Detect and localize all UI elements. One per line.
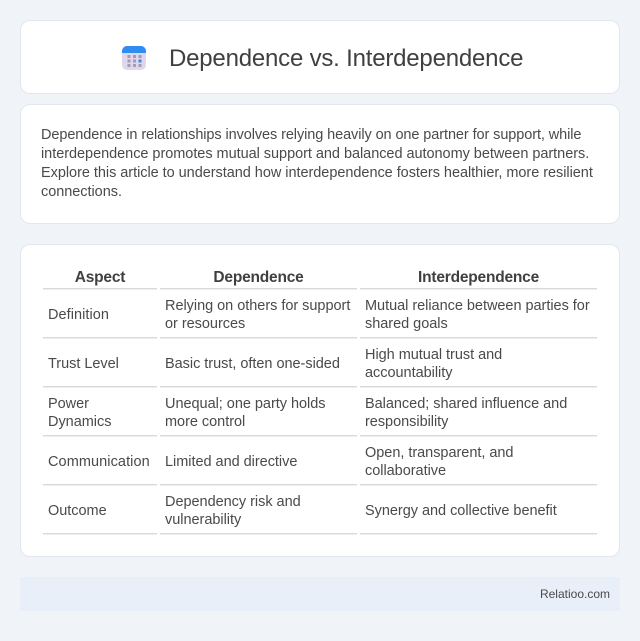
footer text: Relatioo.com <box>540 587 610 601</box>
panel: comparison table <box>20 244 620 557</box>
intro text: Explore this article to understand how interdependence fosters healthier, more resilient <box>41 165 593 181</box>
row: Definition: or resources <box>165 316 245 332</box>
intro text: connections. <box>41 184 122 200</box>
row: Definition: Definition <box>48 307 109 323</box>
row: Definition: Mutual reliance between parties for <box>365 298 590 314</box>
row: Trust Level: Trust Level <box>48 356 119 372</box>
row: Trust Level: Basic trust, often one-sided <box>165 356 340 372</box>
intro text <box>41 127 593 200</box>
table header: Aspect: Aspect <box>75 269 125 286</box>
row: Trust Level: accountability <box>365 365 452 381</box>
intro text: Dependence in relationships involves relying heavily on one partner for support, while <box>41 127 581 143</box>
row: Power Dynamics: Unequal; one party holds <box>165 396 326 412</box>
panel: introduction <box>20 104 620 224</box>
title: Dependence vs. Interdependence <box>169 45 523 72</box>
intro text: interdependence promotes mutual support and balanced autonomy between partners. <box>41 146 589 162</box>
row: Power Dynamics: Dynamics <box>48 414 111 430</box>
row: Outcome: vulnerability <box>165 512 241 528</box>
row: Power Dynamics <box>48 396 567 430</box>
row: Definition: Relying on others for support <box>165 298 350 314</box>
table header: Dependence: Dependence <box>213 269 304 286</box>
row: Trust Level <box>48 347 502 381</box>
row: Outcome: Outcome <box>48 503 107 519</box>
icon: calendar <box>122 46 146 70</box>
row: Power Dynamics: Balanced; shared influence and <box>365 396 567 412</box>
table header: Interdependence: Interdependence <box>418 269 539 286</box>
row: Trust Level: High mutual trust and <box>365 347 502 363</box>
row: Power Dynamics: responsibility <box>365 414 448 430</box>
row: Communication: Limited and directive <box>165 454 297 470</box>
row: Definition <box>48 298 590 332</box>
row: Communication: collaborative <box>365 463 446 479</box>
footer bar <box>20 577 620 611</box>
row: Power Dynamics: Power <box>48 396 89 412</box>
row: Communication <box>48 445 513 479</box>
row: Definition: shared goals <box>365 316 448 332</box>
row: Communication: Communication <box>48 454 150 470</box>
row: Outcome <box>48 494 557 528</box>
row: Communication: Open, transparent, and <box>365 445 513 461</box>
panel: title card <box>20 20 620 94</box>
row: Outcome: Synergy and collective benefit <box>365 503 557 519</box>
row: Power Dynamics: more control <box>165 414 245 430</box>
row: Outcome: Dependency risk and <box>165 494 301 510</box>
